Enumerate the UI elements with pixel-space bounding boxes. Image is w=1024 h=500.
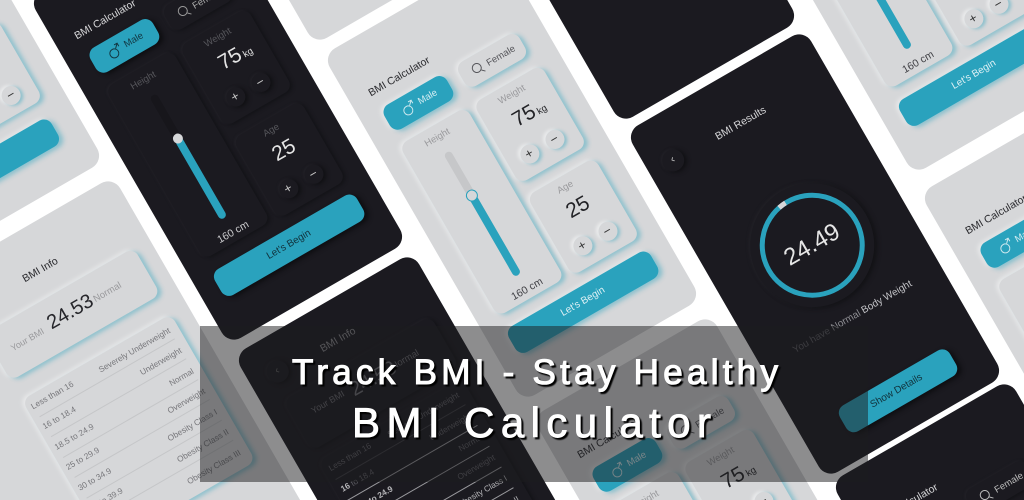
weight minus: [248, 70, 274, 96]
button label: Let's Begin: [559, 285, 607, 319]
female pill: [455, 31, 529, 90]
weight value: 75kg: [717, 462, 758, 494]
height panel: [105, 50, 271, 260]
label: your BMI: Your BMI: [9, 326, 46, 353]
button label: Let's Begin: [265, 228, 313, 262]
panel: dark blank card, top: [421, 0, 799, 124]
back button: [658, 145, 688, 175]
age label: Age: [261, 121, 281, 139]
icon: female: [472, 63, 486, 73]
weight panel: [473, 65, 587, 184]
weight plus: [516, 141, 542, 167]
weight panel: [179, 8, 293, 127]
let's begin button: [896, 21, 1024, 129]
height panel: [399, 107, 565, 317]
BMI table rows: Severely Underweight: [97, 325, 172, 375]
panel: light calculator card, right: [920, 90, 1024, 500]
minus button: [0, 83, 24, 108]
age plus: +: [281, 180, 295, 197]
icon: male: [109, 42, 120, 58]
age minus: [301, 162, 327, 187]
icon: male: [612, 462, 622, 478]
icon: female: [178, 6, 192, 16]
weight plus: [222, 84, 248, 110]
icon: male: [403, 100, 414, 116]
BMI table rows: Overweight: [455, 452, 497, 482]
back button: [263, 356, 293, 386]
age plus: +: [575, 237, 589, 254]
age minus: [595, 219, 621, 244]
weight minus: −: [547, 130, 561, 147]
age plus: [569, 233, 595, 259]
value: 24.53: 24.53: [43, 290, 97, 334]
weight value: 75kg: [508, 100, 549, 132]
label: normal: Normal: [389, 348, 421, 372]
slider: [172, 134, 226, 219]
weight minus: [542, 127, 568, 153]
panel: light calculator card, top left: [0, 0, 104, 264]
show details button: [836, 346, 961, 436]
panel: dark BMI info card: [234, 252, 612, 500]
panel: light calculator card, bottom centre: [532, 314, 910, 500]
label: male: Male: [625, 449, 648, 469]
weight plus: +: [522, 145, 536, 162]
weight label: Weight: [705, 445, 736, 469]
app name: BMI Calculator: [352, 399, 711, 446]
BMI table rows: Obesity Class II: [175, 427, 230, 464]
icon: male: [1000, 238, 1010, 254]
minus button: −: [4, 86, 18, 103]
tagline: Track BMI - Stay Healthy: [292, 353, 778, 392]
heading: BMI Info: [318, 325, 358, 355]
weight plus: +: [228, 88, 242, 105]
value: 160 cm: 160 cm: [900, 48, 936, 76]
button label: Let's Begin: [950, 58, 998, 92]
label: your BMI: Your BMI: [309, 389, 346, 416]
message: You have Normal Body Weight: [791, 278, 914, 356]
BMI table rows: [327, 390, 521, 500]
male pill: [589, 435, 666, 495]
weight label: Weight: [202, 26, 233, 50]
value: 160 cm: 160 cm: [215, 218, 251, 246]
height panel: [996, 245, 1024, 455]
female pill: [664, 393, 738, 452]
BMI table rows: 18.5 to 24.9: [53, 421, 96, 452]
label: normal: Normal: [92, 280, 124, 305]
age panel: [527, 157, 640, 276]
weight minus: −: [253, 73, 267, 90]
BMI table rows: Normal: [457, 431, 485, 453]
value: 160 cm: 160 cm: [509, 275, 545, 303]
male pill: [977, 211, 1024, 271]
panel: dark calculator card, bottom right: [831, 379, 1024, 500]
slider: [876, 0, 911, 49]
label: male: Male: [416, 87, 439, 107]
female pill: [161, 0, 235, 33]
age minus: −: [600, 222, 614, 239]
panel: light calculator card, top right: [714, 0, 1024, 175]
age value: 25: [562, 191, 594, 223]
BMI table rows: Underweight: [427, 411, 473, 443]
value: 24.53: 24.53: [346, 357, 400, 401]
BMI table rows: Underweight: [138, 345, 183, 377]
icon: female: [680, 425, 694, 434]
weight panel: [682, 427, 796, 500]
BMI table rows: Less than 16: [327, 441, 373, 473]
heading: BMI Calculator: [575, 416, 641, 461]
age minus: [986, 0, 1012, 17]
heading: BMI Info: BMI Info: [20, 255, 60, 285]
BMI table rows: Severely Underweight: [385, 390, 461, 439]
slider: [445, 152, 520, 276]
age panel: [0, 19, 43, 138]
age value: 25: [268, 134, 300, 166]
age plus: [960, 6, 986, 32]
label: female: Female: [485, 43, 518, 69]
male pill: [380, 73, 457, 133]
let's begin button: [505, 248, 662, 356]
age plus: [275, 176, 301, 202]
banner overlay: [200, 326, 868, 482]
heading: BMI Results: [713, 104, 768, 143]
panel: dark BMI results card: [626, 29, 1004, 479]
panel: light blank card, top: [115, 0, 493, 45]
let's begin button: [211, 191, 368, 299]
let's begin button: [0, 116, 62, 224]
ring: [760, 192, 865, 298]
BMI table rows: Normal: [167, 366, 195, 388]
BMI table rows: Obesity Class I: [166, 407, 219, 443]
age panel: [233, 100, 346, 219]
weight label: Weight: [496, 83, 527, 107]
height panel: [608, 469, 774, 500]
female pill: [963, 458, 1024, 500]
BMI table rows: Less than 16: [29, 379, 75, 411]
BMI table rows: Obesity Class III: [185, 447, 242, 486]
BMI table rows: 16 to 18.4: [41, 404, 78, 431]
back button: ‹: [273, 364, 282, 377]
heading: BMI Calculator: [366, 54, 432, 99]
BMI table rows: 25 to 29.9: [64, 445, 101, 472]
BMI table rows: Overweight: [166, 386, 207, 416]
label: female: Female: [694, 405, 727, 431]
icon: female: [980, 490, 994, 500]
BMI table rows: 30 to 34.9: [76, 465, 113, 493]
button label: Show Details: [868, 372, 925, 410]
panel: light BMI info card: [0, 176, 313, 500]
height panel: [790, 0, 956, 90]
back button: ‹: [668, 153, 677, 166]
label: male: Male: [122, 30, 145, 50]
BMI table rows: [29, 325, 242, 500]
value: 24.49: 24.49: [779, 218, 845, 271]
table panel: [22, 314, 256, 500]
male pill: [86, 16, 163, 76]
age plus: +: [966, 10, 980, 27]
age minus: −: [306, 165, 320, 182]
age label: Age: [555, 178, 575, 196]
height label: Height: [423, 126, 452, 149]
height label: Height: [129, 69, 158, 92]
table panel: [318, 378, 557, 500]
panel: light calculator card, centre: [323, 0, 701, 402]
score panel: [0, 248, 161, 381]
BMI table rows: 16 to 18.4: [339, 467, 376, 494]
score panel: [283, 316, 459, 451]
weight minus: [751, 489, 777, 500]
weight value: 75kg: [214, 43, 255, 75]
panel: dark calculator card: [29, 0, 407, 345]
age panel: [918, 0, 1024, 49]
result gauge: [728, 161, 897, 330]
